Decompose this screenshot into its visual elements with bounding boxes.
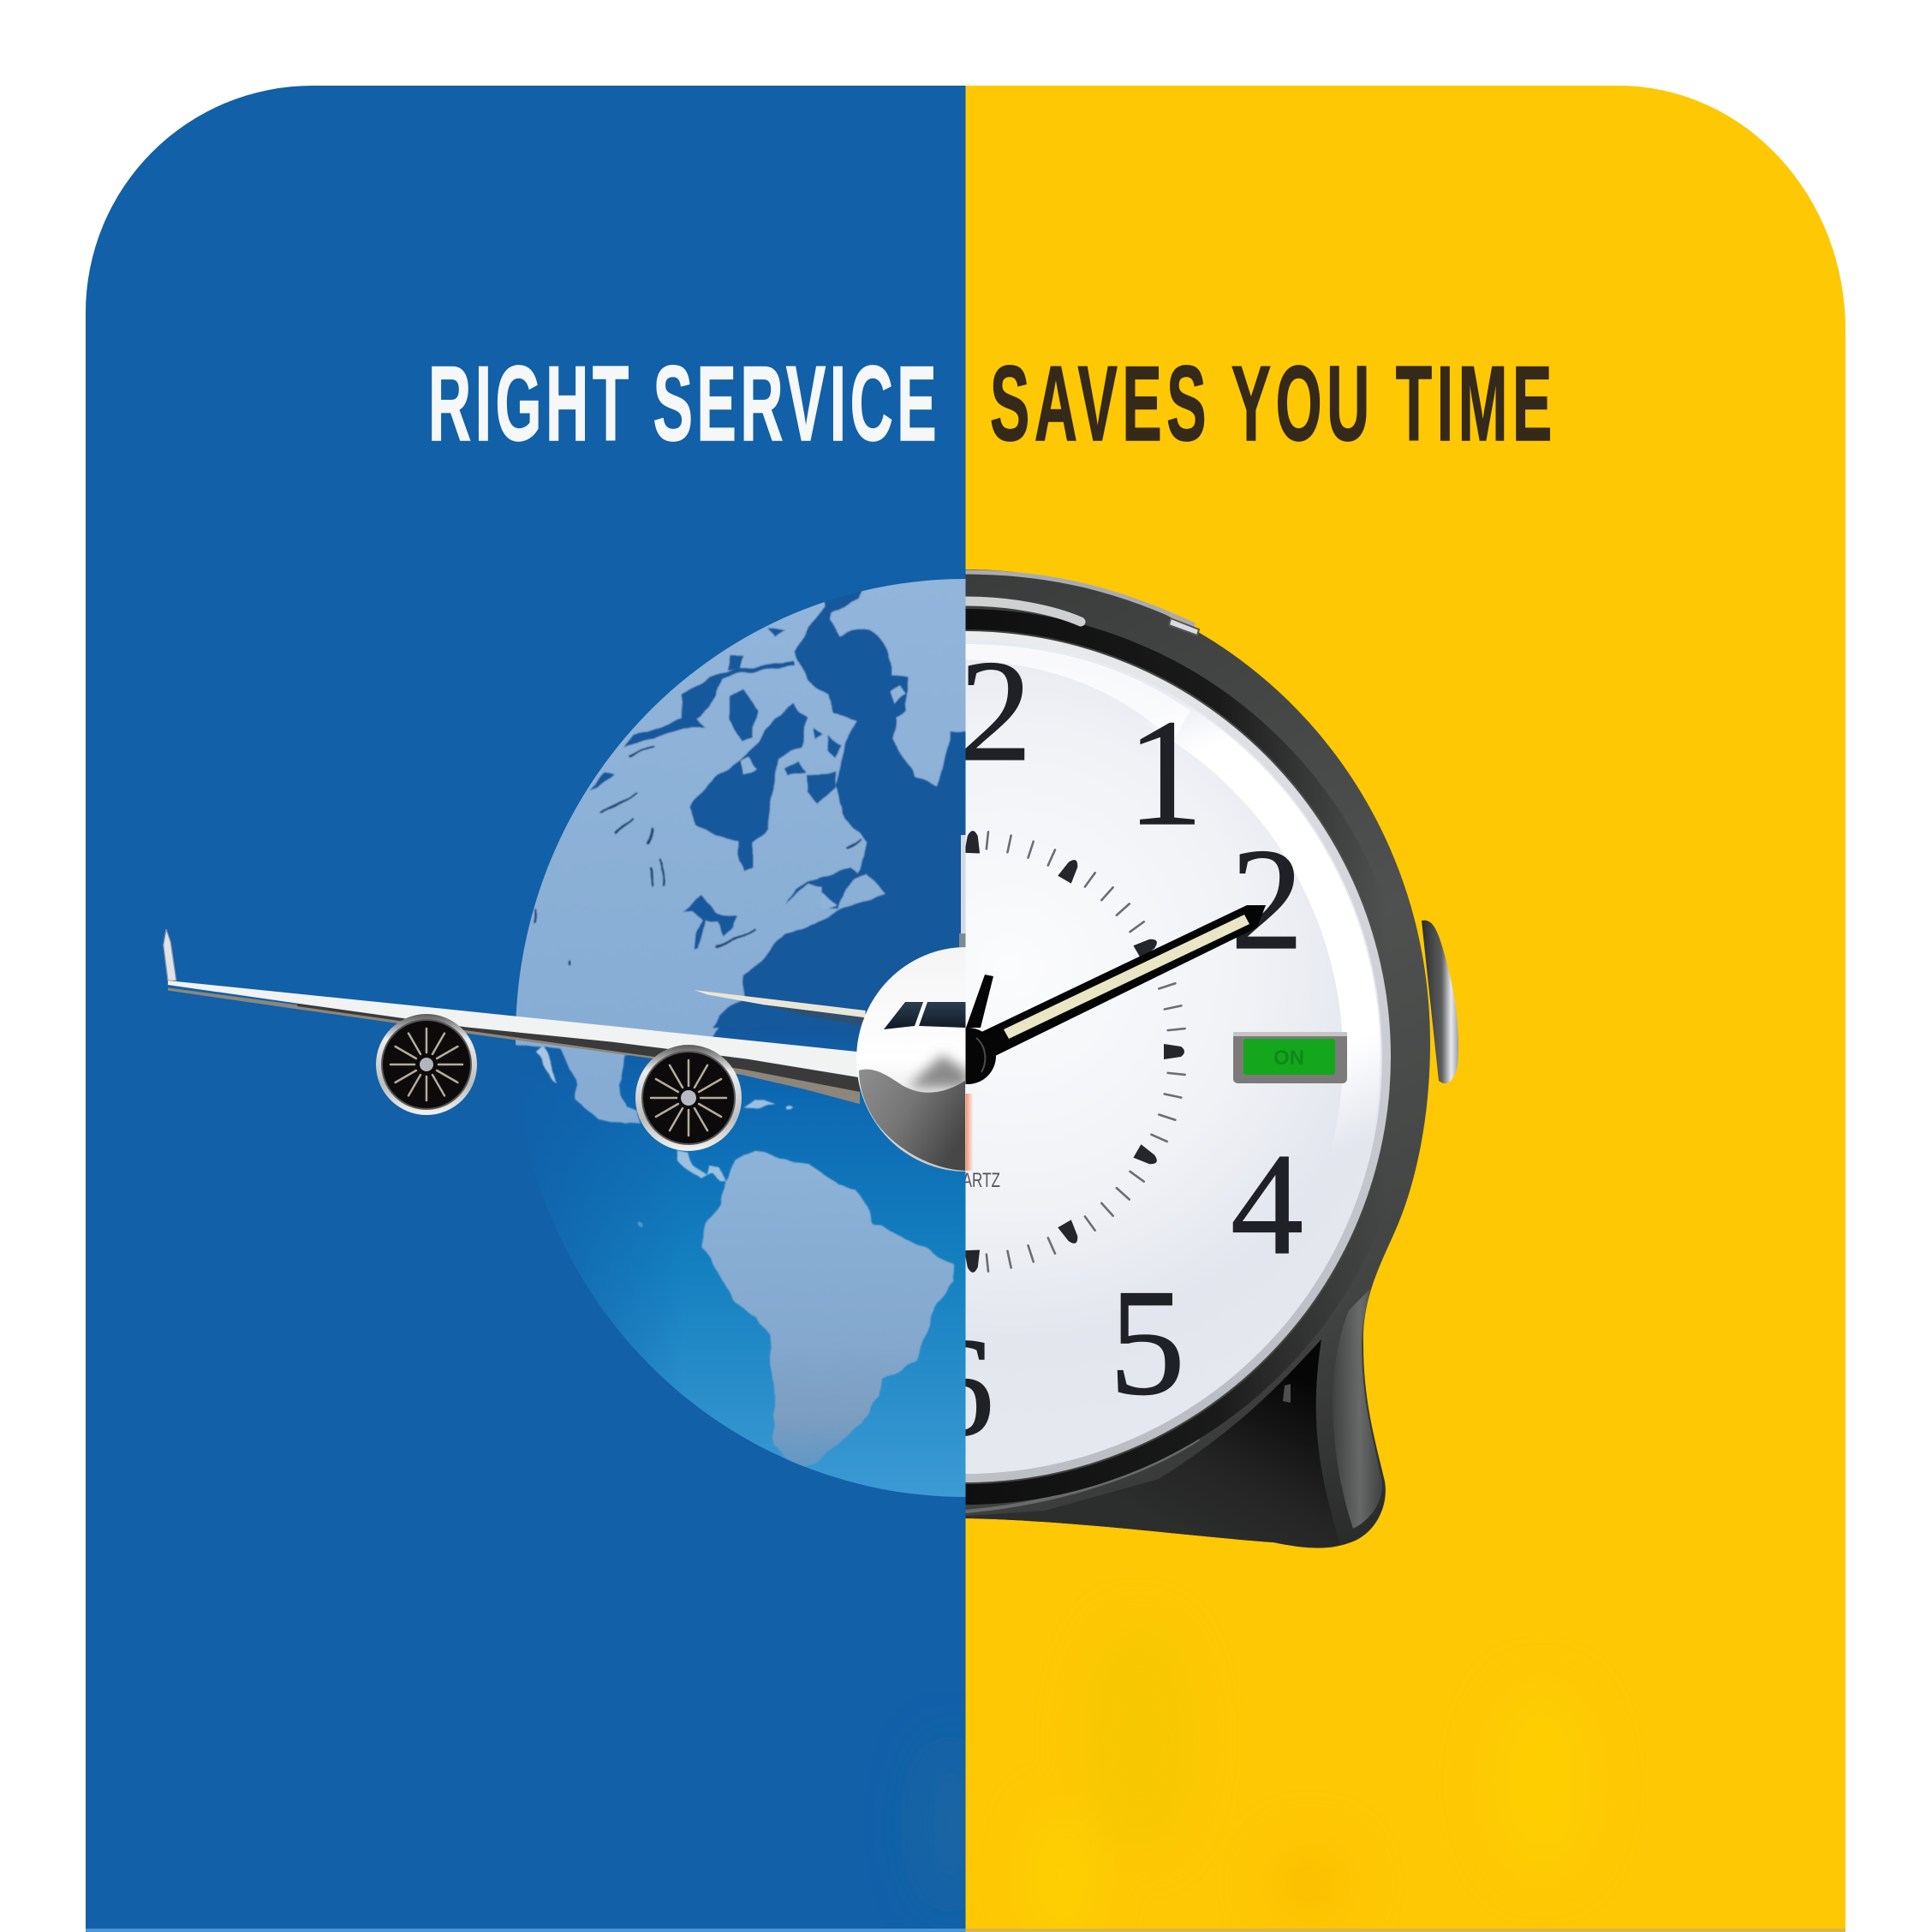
clock numerals: 1 — [1127, 688, 1203, 857]
continent: north america — [516, 579, 966, 1124]
orange reflection strip — [966, 1094, 973, 1171]
winglet — [164, 929, 176, 981]
clock body and foot — [965, 569, 1430, 1548]
continent: atlantic and hudson bay waters — [535, 579, 978, 1028]
near wing and winglet — [164, 929, 860, 1104]
airplane: left half — [164, 929, 1076, 1172]
on switch — [1233, 1032, 1347, 1083]
center hub — [939, 1028, 996, 1084]
bezel rim details — [966, 570, 1351, 1505]
wing lower edge — [168, 987, 860, 1104]
continent: south america — [701, 1150, 955, 1468]
engine: outer — [376, 1014, 477, 1115]
clock side button — [1422, 921, 1458, 1083]
nose soft shading — [908, 1055, 968, 1088]
minute hand — [980, 905, 1266, 1058]
clock sliver on split line — [959, 835, 966, 947]
foot small reflection — [1283, 1384, 1291, 1403]
clock numerals: 2 — [1231, 819, 1303, 980]
far wing — [694, 990, 866, 1026]
heading: right service saves you time — [428, 345, 1552, 463]
clock numerals: 2 — [959, 630, 1032, 791]
clock chrome ring — [966, 631, 1391, 1482]
engine: inner — [635, 1045, 742, 1151]
clock numerals — [966, 663, 1302, 1436]
clock foot side highlight — [1333, 1289, 1382, 1529]
brand label: QUARTZ — [940, 1169, 1000, 1192]
alarm clock: right half — [966, 569, 1458, 1548]
glare band — [1174, 714, 1380, 1121]
on switch: ON — [1273, 1046, 1304, 1070]
hour ticks — [964, 831, 1184, 1273]
nose shadow — [859, 1070, 965, 1171]
minute ticks — [987, 832, 1185, 1272]
clock foot shading — [965, 1339, 1340, 1547]
bezel lower highlight — [965, 1439, 1199, 1512]
clock numerals: 6 — [923, 1309, 993, 1465]
clock numerals: 4 — [1231, 1124, 1303, 1285]
hub highlight — [976, 1038, 985, 1072]
heading: right service saves you time: SAVES YOU TIME — [990, 345, 1552, 463]
top glare — [966, 644, 1190, 730]
detail: small lakes — [535, 747, 862, 964]
continent: baja california — [536, 1046, 556, 1083]
clock numerals: 5 — [1109, 1257, 1185, 1427]
wing underside — [297, 1004, 860, 1092]
continent: caribbean islands — [637, 1100, 791, 1225]
clock top button — [1169, 618, 1199, 635]
clock hands — [939, 905, 1266, 1084]
airplane nose — [856, 947, 1076, 1172]
cockpit windows — [884, 1002, 966, 1029]
heading: right service saves you time: RIGHT SERVICE — [428, 345, 937, 463]
wing top surface — [168, 981, 860, 1077]
hour hand — [966, 975, 993, 1028]
globe: left half — [516, 579, 966, 1497]
clock face — [966, 659, 1382, 1474]
continent: central america — [677, 1150, 724, 1180]
minute hand lume — [1004, 915, 1249, 1039]
